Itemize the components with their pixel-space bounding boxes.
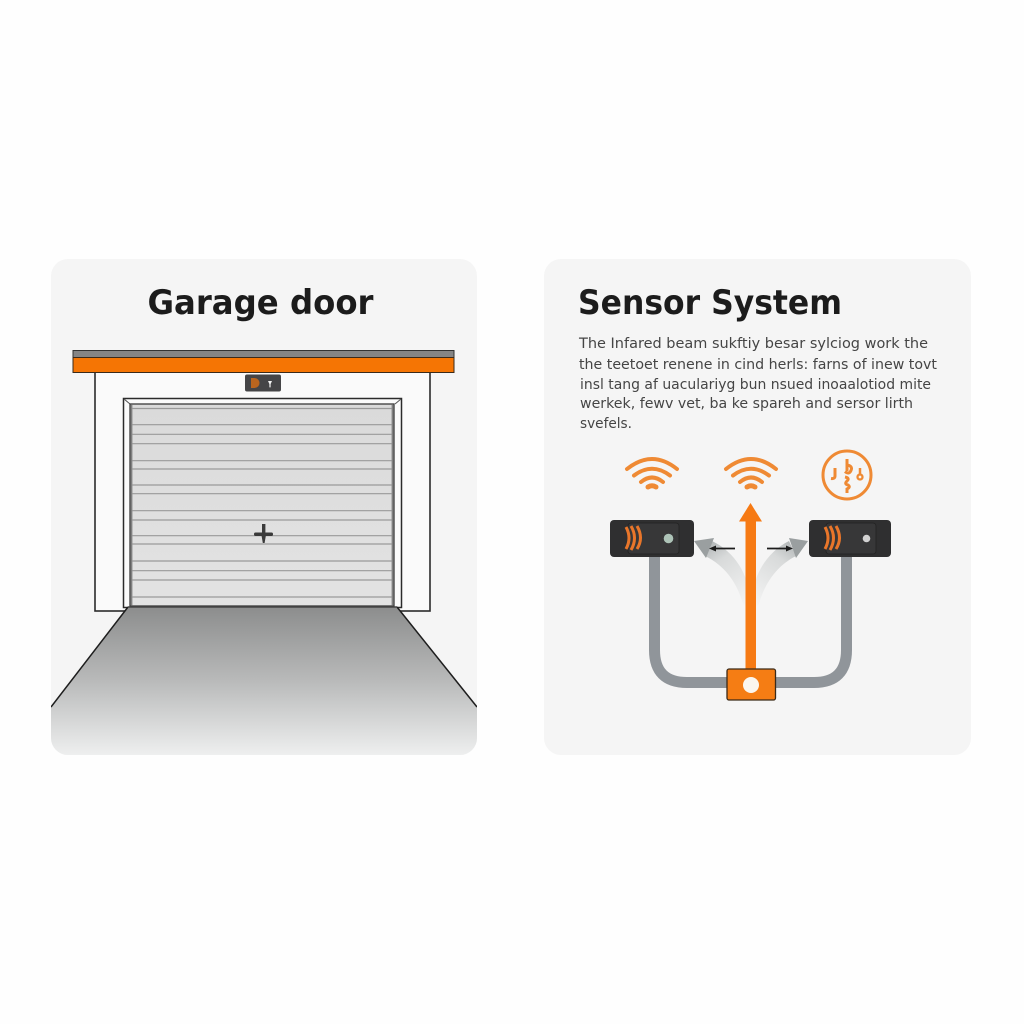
text block: description: insl tang af uaculariyg bun nsued inoaalotiod mite xyxy=(580,377,931,393)
icon: door handle xyxy=(254,524,273,543)
arrow: small black left xyxy=(709,546,735,552)
sensor: right xyxy=(809,520,891,557)
icon: wifi center xyxy=(726,459,776,487)
arrow: orange up xyxy=(739,503,762,672)
arrow: curved right xyxy=(752,538,808,606)
text block: description: The Infared beam sukftiy besar sylciog work the xyxy=(578,336,928,352)
arrow: curved left xyxy=(694,538,750,606)
illustration: garage wall xyxy=(95,372,430,611)
illustration: header beam xyxy=(73,350,454,372)
cable: left xyxy=(654,556,730,682)
text block: description: the teetoet renene in cind herls: farns of inew tovt xyxy=(579,357,937,373)
icon: opener unit xyxy=(245,374,281,392)
sensor: left xyxy=(610,520,694,557)
cable: right xyxy=(772,556,846,682)
heading: garage door: Garage door xyxy=(148,283,374,323)
illustration: driveway floor xyxy=(51,607,477,756)
icon: wifi left xyxy=(627,459,677,487)
panel: garage door xyxy=(51,259,477,756)
illustration: door frame xyxy=(124,398,402,608)
heading: sensor system: Sensor System xyxy=(578,283,842,323)
panel: sensor system xyxy=(544,259,971,755)
text block: description xyxy=(578,336,937,432)
control box xyxy=(727,669,776,700)
arrow: small black right xyxy=(767,546,793,552)
icon: circle symbol xyxy=(823,451,871,499)
text block: description: werkek, fewv vet, ba ke spareh and sersor lirth xyxy=(580,396,913,412)
text block: description: svefels. xyxy=(580,416,632,432)
illustration: door panel xyxy=(130,404,394,606)
